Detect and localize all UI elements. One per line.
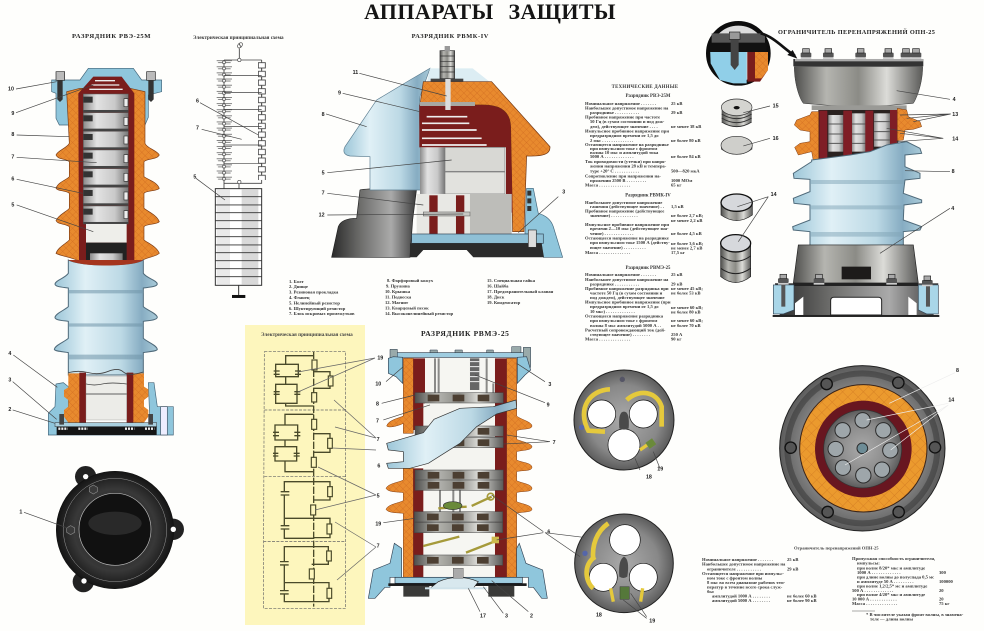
РВМК: top surface: [427, 68, 492, 83]
limiter labels: 16: [773, 136, 779, 142]
labels: 14: [948, 398, 954, 404]
technical data: предразрядном времени от 1,5 до: [590, 304, 659, 309]
technical data: волны 8 мкс амплитудой 5000 А . .: [590, 323, 661, 328]
labels РВМЭ: 9: [547, 403, 550, 409]
heading: ОПН-25: ОГРАНИЧИТЕЛЬ ПЕРЕНАПРЯЖЕНИЙ ОПН-25: [778, 28, 935, 36]
orange fins: [794, 112, 819, 161]
section 2: [273, 414, 332, 472]
technical data: Импульсное пробивное напряжение при: [585, 128, 669, 134]
parts legend: 11. Подвеска: [385, 294, 412, 300]
labels РВЭ upper: 9: [11, 111, 14, 117]
outer flange: [780, 366, 945, 531]
РВМК labels: 9: [338, 90, 341, 96]
technical data: частоте 50 Гц (в сухом состоянии и: [590, 290, 663, 296]
labels РВЭ lower: [8, 351, 68, 528]
inner rods: [435, 358, 493, 513]
technical data: 1,5 кВ: [671, 204, 684, 209]
lower metal base: [793, 245, 918, 283]
porcelain housing: [54, 260, 157, 375]
fin shadows: [68, 290, 143, 359]
technical data: ствующее значение) . . . . . . . .: [590, 332, 650, 337]
technical data: не менее 2,2 кВ: [671, 218, 702, 223]
labels РВМЭ: [375, 355, 556, 619]
parts legend: 5. Нелинейный резистор: [289, 300, 340, 306]
resistor cylinder single: [721, 194, 752, 220]
round disc top: [574, 370, 674, 470]
labels РВЭ lower: 2: [8, 407, 11, 413]
technical data: 2 мкс . . . . . . . . . . . . . .: [590, 138, 633, 143]
base plate and bottom: [55, 423, 157, 427]
limiter data left column: амплитудой 1000 А . . . . . . . .: [712, 594, 770, 598]
labels РВМЭ: 17: [480, 613, 486, 619]
relief valve: [430, 577, 478, 588]
technical data: 500—820 мкА: [671, 168, 700, 174]
orange insulator body: [56, 88, 159, 268]
top bolts: [390, 347, 531, 369]
technical data: 29 кВ: [671, 282, 682, 286]
parts legend: [289, 278, 554, 316]
parts legend: 10. Крышка: [385, 289, 411, 294]
porcelain shading: [810, 180, 904, 237]
cap bolts: [56, 72, 155, 80]
technical data: Остающееся напряжение на разряднике: [585, 142, 669, 147]
orange walls with fins right: [507, 358, 532, 577]
base orange walls: [64, 373, 80, 423]
labels РВМЭ: 6: [377, 463, 380, 469]
flanges: [388, 357, 403, 383]
technical data: не более 2,7 кВ;: [671, 213, 704, 218]
labels РВЭ upper: 10: [8, 87, 14, 93]
circuit heading: Электрическая принципиальная схема: [261, 332, 353, 338]
limiter labels: 13: [952, 112, 958, 118]
technical data: жении напряжении 28 кВ и темпера-: [590, 164, 667, 168]
parts legend: 12. Магнит: [385, 300, 409, 305]
blue metal cap: [52, 68, 162, 125]
РВМК: resistor blocks: [420, 147, 505, 194]
technical data: чение) . . . . . . . . . . . . .: [590, 231, 633, 236]
limiter data right column: * В числителе указан фронт волны, в знамена-: [866, 612, 964, 617]
limiter data right column: теле — длина волны: [870, 616, 913, 622]
limiter data heading: Ограничитель перенапряжений ОПН-25: [794, 546, 879, 550]
technical data: Разрядник РВМЭ-25: [626, 266, 671, 271]
technical data: Разрядник РВЭ-25М: [626, 94, 671, 99]
technical data: ТЕХНИЧЕСКИЕ ДАННЫЕ: [612, 85, 678, 90]
technical data: значение) . . . . . . . . . . . .: [590, 213, 638, 218]
technical data: 65 кг: [671, 182, 681, 188]
РВМЭ circuit diagram: [261, 332, 353, 608]
technical data: не менее 2,7 кВ: [671, 246, 702, 250]
top cap: [794, 67, 923, 106]
technical data: Разрядник РВМК-IV: [625, 194, 671, 198]
technical data: Масса . . . . . . . . . . . . . .: [585, 250, 630, 255]
bottom plate: [395, 577, 522, 583]
technical data: не менее 60 кВ;: [671, 318, 703, 323]
technical data: волны 10 мкс и амплитудой тока: [590, 150, 659, 155]
red liners: [819, 110, 897, 160]
porcelain: [793, 142, 922, 247]
parts legend: 2. Днище: [289, 284, 308, 289]
limiter data right column: при длине волны до полуспада 0,5 мс: [857, 574, 934, 580]
labels: [845, 368, 959, 465]
limiter data left column: Номинальное напряжение . . . . . . .: [702, 557, 773, 562]
labels schematic: 7: [196, 125, 199, 131]
technical data: при импульсном токе с фронтом: [590, 146, 657, 151]
heading: circuit РВЭ: Электрическая принципиальная схема: [193, 35, 284, 41]
parts legend: 4. Фланец: [289, 295, 310, 300]
panel: yellow circuit background: [245, 325, 365, 625]
technical data: Расчетный сопровождающий ток (дей-: [585, 328, 666, 332]
labels РВЭ upper: 7: [11, 155, 14, 161]
labels РВМЭ: 19: [377, 355, 383, 361]
limiter data right column: Масса . . . . . . . . . . . . . .: [852, 601, 897, 606]
limiter data right column: 500 А . . . . . . . . . . . . .: [852, 588, 893, 593]
labels РВМЭ: 7: [376, 419, 379, 425]
labels discs: 19: [649, 619, 655, 625]
limiter data right column: 75 кг: [939, 601, 949, 606]
technical data: дем), действующее значение . . . .: [590, 124, 658, 129]
technical data: Сопротивление при напряжении на-: [585, 174, 661, 178]
base bolts: [59, 414, 153, 425]
technical data: Пробивное напряжение при частоте: [585, 114, 660, 120]
under cap band: [812, 105, 907, 110]
interior: [423, 357, 497, 577]
base inner stack: [86, 377, 127, 420]
РВМК labels: 7: [322, 191, 325, 197]
labels РВМЭ: 2: [530, 613, 533, 619]
section 4: [280, 547, 332, 602]
technical data: времени 2—10 мкс (действующее зна-: [590, 226, 669, 231]
limiter data right column: Пропускная способность ограничителя,: [852, 556, 935, 561]
technical data: при импульсном токе с фронтом: [590, 318, 657, 323]
limiter data left column: ограничителе . . . . . . . . . . .: [707, 566, 761, 572]
technical data: 29 кВ: [671, 110, 682, 115]
technical data: не более 80 кВ: [671, 138, 701, 143]
labels discs: 19: [657, 467, 663, 473]
technical data: 250 А: [671, 332, 683, 337]
technical data: ющее значение) . . . . . . . . . .: [590, 245, 646, 250]
leader lines linking diagram to section: [298, 358, 376, 580]
technical data: Остающееся напряжение на разряднике: [585, 236, 669, 240]
limiter data right column: и амплитуде 50 А . . . . . . . . .: [857, 579, 914, 584]
yellow shunt resistors and capacitor: [423, 493, 499, 553]
torn porcelain: [387, 400, 517, 468]
limiter data left column: не более 90 кВ: [787, 598, 817, 603]
inner gray core: [824, 410, 902, 488]
arrester РВМЭ-25 section: [368, 347, 674, 625]
base red liner: [79, 373, 133, 423]
arrester РВМЭ-25 heading: РАЗРЯДНИК РВМЭ-25: [421, 329, 510, 338]
base blue flange: [48, 383, 173, 435]
labels discs: 18: [646, 474, 652, 480]
limiter labels: 14: [771, 192, 777, 198]
labels РВЭ lower: 1: [19, 509, 22, 515]
technical data: Наибольшее допустимое напряжение: [585, 200, 662, 205]
limiter labels: 4: [951, 206, 954, 212]
labels РВМЭ: 7: [377, 437, 380, 443]
technical data: гашения (действующее значение) . .: [590, 204, 664, 209]
technical data: Ток проводимости (утечки) при напря-: [585, 159, 667, 164]
РВМК: gap chamber: [417, 194, 512, 234]
labels РВМЭ: 6: [547, 529, 550, 535]
technical data: разряднике . . . . . . . . . . .: [590, 282, 639, 286]
parts legend: 9. Пружина: [386, 284, 411, 288]
labels schematic: 5: [193, 174, 196, 180]
parts legend: 13. Кварцевый песок: [385, 306, 429, 310]
inner gray stacks: [818, 110, 898, 160]
limiter data left column: ператур в течение всего срока служ-: [707, 584, 783, 590]
technical data: пряжении 2500 В . . . . . . . . .: [590, 178, 646, 183]
nameplate: [842, 267, 871, 279]
technical data: 17,5 кг: [671, 250, 685, 255]
technical data: не более 3,6 кВ;: [671, 241, 704, 246]
limiter data left column: бы:: [707, 589, 715, 594]
labels РВМЭ: 7: [553, 440, 556, 446]
limiter data left column: 25 кВ: [787, 557, 798, 562]
technical data: не менее 45 кВ;: [671, 286, 703, 291]
technical data: Импульсное пробивное напряжение (при: [585, 300, 671, 304]
parts legend: 15. Специальная гайка: [487, 278, 536, 283]
technical data: туре +20° С . . . . . . . . . . .: [590, 168, 639, 174]
labels РВЭ upper: 8: [11, 132, 14, 138]
technical data: 25 кВ: [671, 272, 682, 277]
limiter data right column: при волне 4/20* мкс и амплитуде: [857, 592, 925, 597]
technical data: Номинальное напряжение . . . . . . .: [585, 101, 656, 106]
cut line of porcelain: [68, 369, 143, 374]
technical data: Остающееся напряжение разрядника: [585, 314, 664, 318]
РВМК labels: [319, 70, 565, 233]
red liners: [413, 358, 507, 577]
porcelain cut-out top: [68, 260, 143, 265]
limiter data right column: 1000 А . . . . . . . . . . . . .: [857, 570, 901, 575]
limiter data left column: Остающееся напряжение при импульс-: [702, 571, 784, 576]
resistor stack: [215, 189, 262, 285]
labels РВЭ lower: 4: [8, 351, 11, 357]
limiter labels: [737, 91, 958, 253]
technical data: не более 80 кВ: [671, 310, 701, 314]
limiter labels: 4: [953, 97, 956, 103]
limiter data left column: ном токе с фронтом волны: [707, 576, 763, 580]
labels: 8: [956, 368, 959, 374]
limiter labels: 8: [952, 169, 955, 175]
technical data: не более 53 кВ: [671, 290, 701, 296]
technical data: Масса . . . . . . . . . . . . . .: [585, 336, 630, 342]
dashed sections: [263, 352, 346, 608]
limiter data left column: не более 60 кВ: [787, 594, 817, 598]
limiter data right column: 300: [939, 570, 947, 575]
technical data: не менее 38 кВ: [671, 124, 701, 129]
resistor discs: [828, 413, 898, 483]
labels РВЭ upper: [8, 82, 97, 232]
РВМК labels: 5: [322, 171, 325, 177]
orange ring: [800, 385, 927, 512]
labels schematic: 6: [196, 99, 199, 105]
flange bolts: [785, 377, 941, 518]
limiter data right column: 10 000 А . . . . . . . . . . . .: [852, 596, 897, 602]
technical data: не более 4,5 кВ: [671, 231, 702, 236]
РВМК labels: 3: [562, 189, 565, 195]
technical data: не менее 60 кВ;: [671, 305, 703, 310]
labels РВМЭ: 7: [377, 543, 380, 549]
disc units: [414, 393, 503, 565]
limiter data right column: импульсы:: [857, 560, 880, 566]
foot bolts: [778, 274, 933, 286]
technical data: 25 кВ: [671, 101, 682, 106]
parts legend: 18. Диск: [487, 294, 505, 300]
labels РВМЭ: 3: [505, 613, 508, 619]
labels РВЭ upper: 5: [11, 203, 14, 209]
labels schematic: [193, 99, 258, 200]
arrester РВЭ-25М section, upper part: [8, 68, 162, 268]
limiter data right column: 100000: [939, 579, 953, 584]
labels РВМЭ: 5: [377, 493, 380, 499]
labels discs: [545, 452, 663, 625]
lower cylinder: [86, 243, 127, 263]
cap bolts: [801, 49, 921, 59]
РВМК: dark cavity: [419, 105, 513, 213]
limiter data right column: 20: [939, 588, 944, 593]
schematic ladder: [217, 42, 266, 189]
technical data: Номинальное напряжение . . . . . . .: [585, 272, 656, 277]
bottom view: [56, 466, 184, 592]
inset detail: [708, 23, 768, 83]
technical data: Масса . . . . . . . . . . . . . .: [585, 182, 630, 188]
labels РВЭ lower: 3: [8, 378, 11, 384]
technical data: не более 84 кВ: [671, 154, 701, 159]
red ring: [815, 401, 912, 497]
РВМК labels: 12: [319, 213, 325, 219]
parts legend: 8. Фарфоровый кожух: [387, 278, 434, 283]
РВМК: base plate: [412, 234, 543, 243]
limiter cross-section: [780, 366, 959, 531]
top plate: [396, 353, 524, 357]
РВМК: flange right: [525, 188, 563, 257]
parts legend: 19. Конденсатор: [487, 300, 521, 305]
РВМК: base metal: [332, 188, 417, 257]
РВМК labels: 11: [353, 70, 358, 76]
technical data: Пробивное напряжение разрядника при: [585, 286, 669, 291]
technical data: под дождем), действующее значение: [590, 295, 665, 300]
washer disc: [721, 136, 752, 155]
technical data: [585, 85, 704, 342]
technical data: Наибольшее допустимое напряжение на: [585, 277, 669, 282]
limiter data right column: 20: [939, 596, 944, 602]
labels РВМЭ: 19: [375, 521, 381, 527]
labels discs: 18: [596, 613, 602, 619]
РВМК: porcelain outside: [344, 68, 430, 190]
technical data: Импульсное пробивное напряжение при: [585, 222, 669, 227]
РВМК labels: 8: [322, 112, 325, 118]
parts legend: 16. Шайба: [487, 284, 509, 288]
РВМК: orange section: [420, 82, 550, 232]
center line: [312, 352, 316, 607]
technical data: разряднике . . . . . . . . . . .: [590, 110, 639, 115]
ground symbol: [237, 285, 240, 295]
round disc bottom: [575, 514, 673, 613]
interior gap between walls: [423, 403, 495, 472]
technical data: 1000 МОм: [671, 178, 692, 183]
technical data: 10 мкс) . . . . . . . . . . . . .: [590, 309, 635, 314]
labels РВМЭ: 3: [548, 382, 551, 388]
РВМК: spring coils: [422, 117, 487, 145]
limiter data left column: [702, 557, 817, 603]
arrow from inset: [761, 33, 795, 56]
foot flanges: [773, 285, 794, 314]
limiter data right column: при волне 8/20* мкс и амплитуде: [857, 566, 925, 570]
parts legend: 1. Болт: [289, 279, 304, 284]
limiter data left column: Наибольшее допустимое напряжение на: [702, 562, 786, 566]
washers stack: [721, 99, 752, 127]
limiter data right column: [852, 556, 964, 622]
technical data: 50 Гц (в сухом состоянии и под дож-: [590, 119, 665, 124]
non-linear resistor: [86, 224, 127, 243]
РВЭ schematic and РВМК-IV arrester: [193, 33, 565, 298]
resistor cylinder triple: [721, 235, 751, 282]
technical data: Наибольшее допустимое напряжение на: [585, 106, 669, 110]
parts legend: 7. Блок искровых промежутков: [289, 311, 355, 316]
technical data: 5000 А . . . . . . . . . . . . .: [590, 154, 634, 159]
surge limiter ОПН-25: [708, 23, 958, 317]
limiter labels: 15: [773, 103, 779, 109]
limiter data left column: 29 кВ: [787, 566, 798, 572]
РВМК heading: РАЗРЯДНИК РВМК-IV: [412, 33, 489, 40]
arrester РВЭ-25М, lower part and bottom view: [8, 260, 184, 592]
foot: [775, 283, 938, 317]
limiter data right column: при волне 1,2/2,5* мс и амплитуде: [857, 584, 927, 588]
labels РВЭ upper: 6: [11, 177, 14, 183]
technical data: предразрядном времени от 1,5 до: [590, 133, 659, 138]
top springs: [89, 81, 123, 89]
technical data: при импульсном токе 1500 А (действу-: [590, 240, 670, 245]
technical data: Пробивное напряжение (действующее: [585, 208, 664, 214]
dark red liner: [78, 77, 134, 267]
section 3: [281, 482, 332, 538]
technical data: 90 кг: [671, 336, 681, 342]
РВМК: plate and stud: [420, 102, 475, 106]
limiter labels: 14: [952, 137, 958, 143]
heading: РВЭ-25М: РАЗРЯДНИК РВЭ-25М: [72, 33, 151, 40]
limiter data left column: амплитудой 5000 А . . . . . . . .: [712, 598, 770, 603]
section 1: [274, 356, 333, 406]
parts legend: 3. Резиновая прокладка: [289, 290, 339, 294]
labels РВМЭ: 8: [376, 402, 379, 408]
parts legend: 6. Шунтирующий резистор: [289, 306, 346, 311]
limiter data left column: 8 мкс во всем диапазоне рабочих тем-: [707, 580, 786, 585]
spark gap stack: [83, 94, 128, 224]
labels РВМЭ: 10: [375, 381, 381, 387]
parts legend: 17. Предохранительный клапан: [487, 289, 554, 294]
parts legend: 14. Высоконелинейный резистор: [385, 311, 454, 316]
technical data: не более 70 кВ: [671, 323, 701, 328]
